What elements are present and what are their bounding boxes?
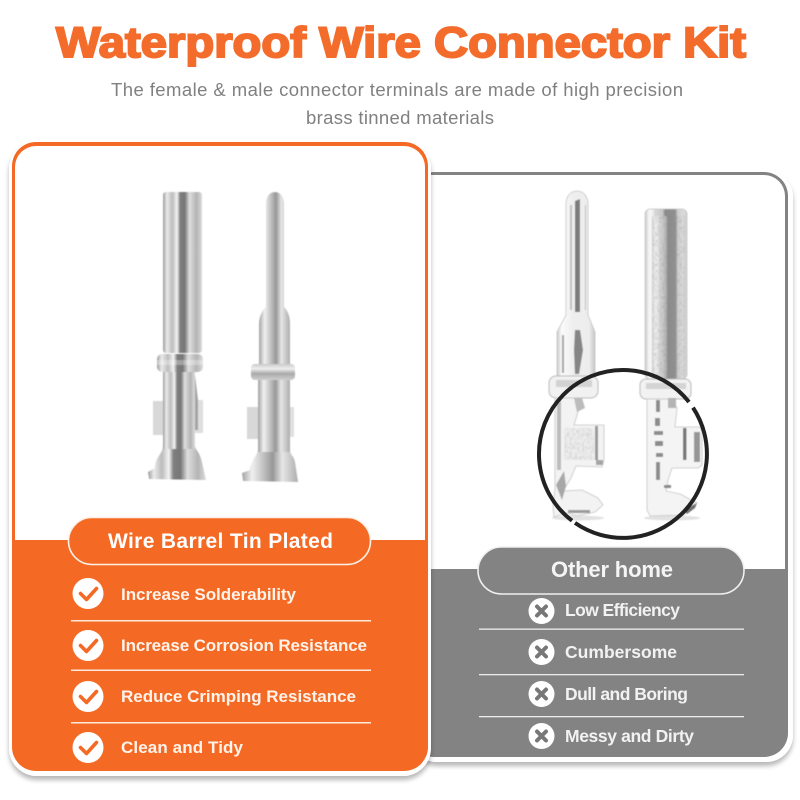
badge: wire barrel tin plated: Wire Barrel Tin Plated	[108, 530, 333, 553]
item: messy and dirty: Messy and Dirty	[565, 726, 694, 746]
highlight circle	[539, 370, 707, 538]
badge: other home: Other home	[551, 557, 673, 582]
item: reduce crimping resistance	[72, 681, 356, 712]
item: increase corrosion resistance: Increase Corrosion Resistance	[121, 636, 367, 655]
badge: other home	[478, 547, 744, 594]
subtitle: The female & male connector terminals are made of high precision	[111, 79, 683, 100]
item: low efficiency: Low Efficiency	[565, 600, 680, 620]
item: messy and dirty	[528, 723, 694, 749]
list: other home drawbacks	[479, 598, 744, 749]
connector photo: pin	[242, 192, 298, 482]
connector photo: other home pin	[549, 191, 604, 520]
item: increase solderability	[72, 578, 297, 609]
item: reduce crimping resistance: Reduce Crimping Resistance	[121, 687, 356, 706]
item: increase solderability: Increase Solderability	[121, 585, 297, 604]
item: increase corrosion resistance	[72, 630, 367, 661]
title: Waterproof Wire Connector Kit	[56, 19, 746, 67]
item: dull and boring	[528, 681, 688, 707]
subtitle: brass tinned materials	[306, 107, 494, 128]
badge: wire barrel tin plated	[68, 518, 370, 564]
item: cumbersome	[528, 639, 677, 665]
connector photo: other home socket	[640, 209, 702, 520]
subtitle	[111, 79, 683, 128]
item: cumbersome: Cumbersome	[565, 642, 677, 662]
panel: other home	[410, 170, 793, 762]
item: dull and boring: Dull and Boring	[565, 684, 688, 704]
list: benefits	[71, 578, 371, 763]
connector photo: socket	[148, 192, 206, 480]
item: low efficiency	[528, 598, 680, 624]
panel: wire barrel tin plated	[9, 141, 431, 776]
item: clean and tidy: Clean and Tidy	[121, 738, 244, 757]
item: clean and tidy	[72, 732, 244, 763]
